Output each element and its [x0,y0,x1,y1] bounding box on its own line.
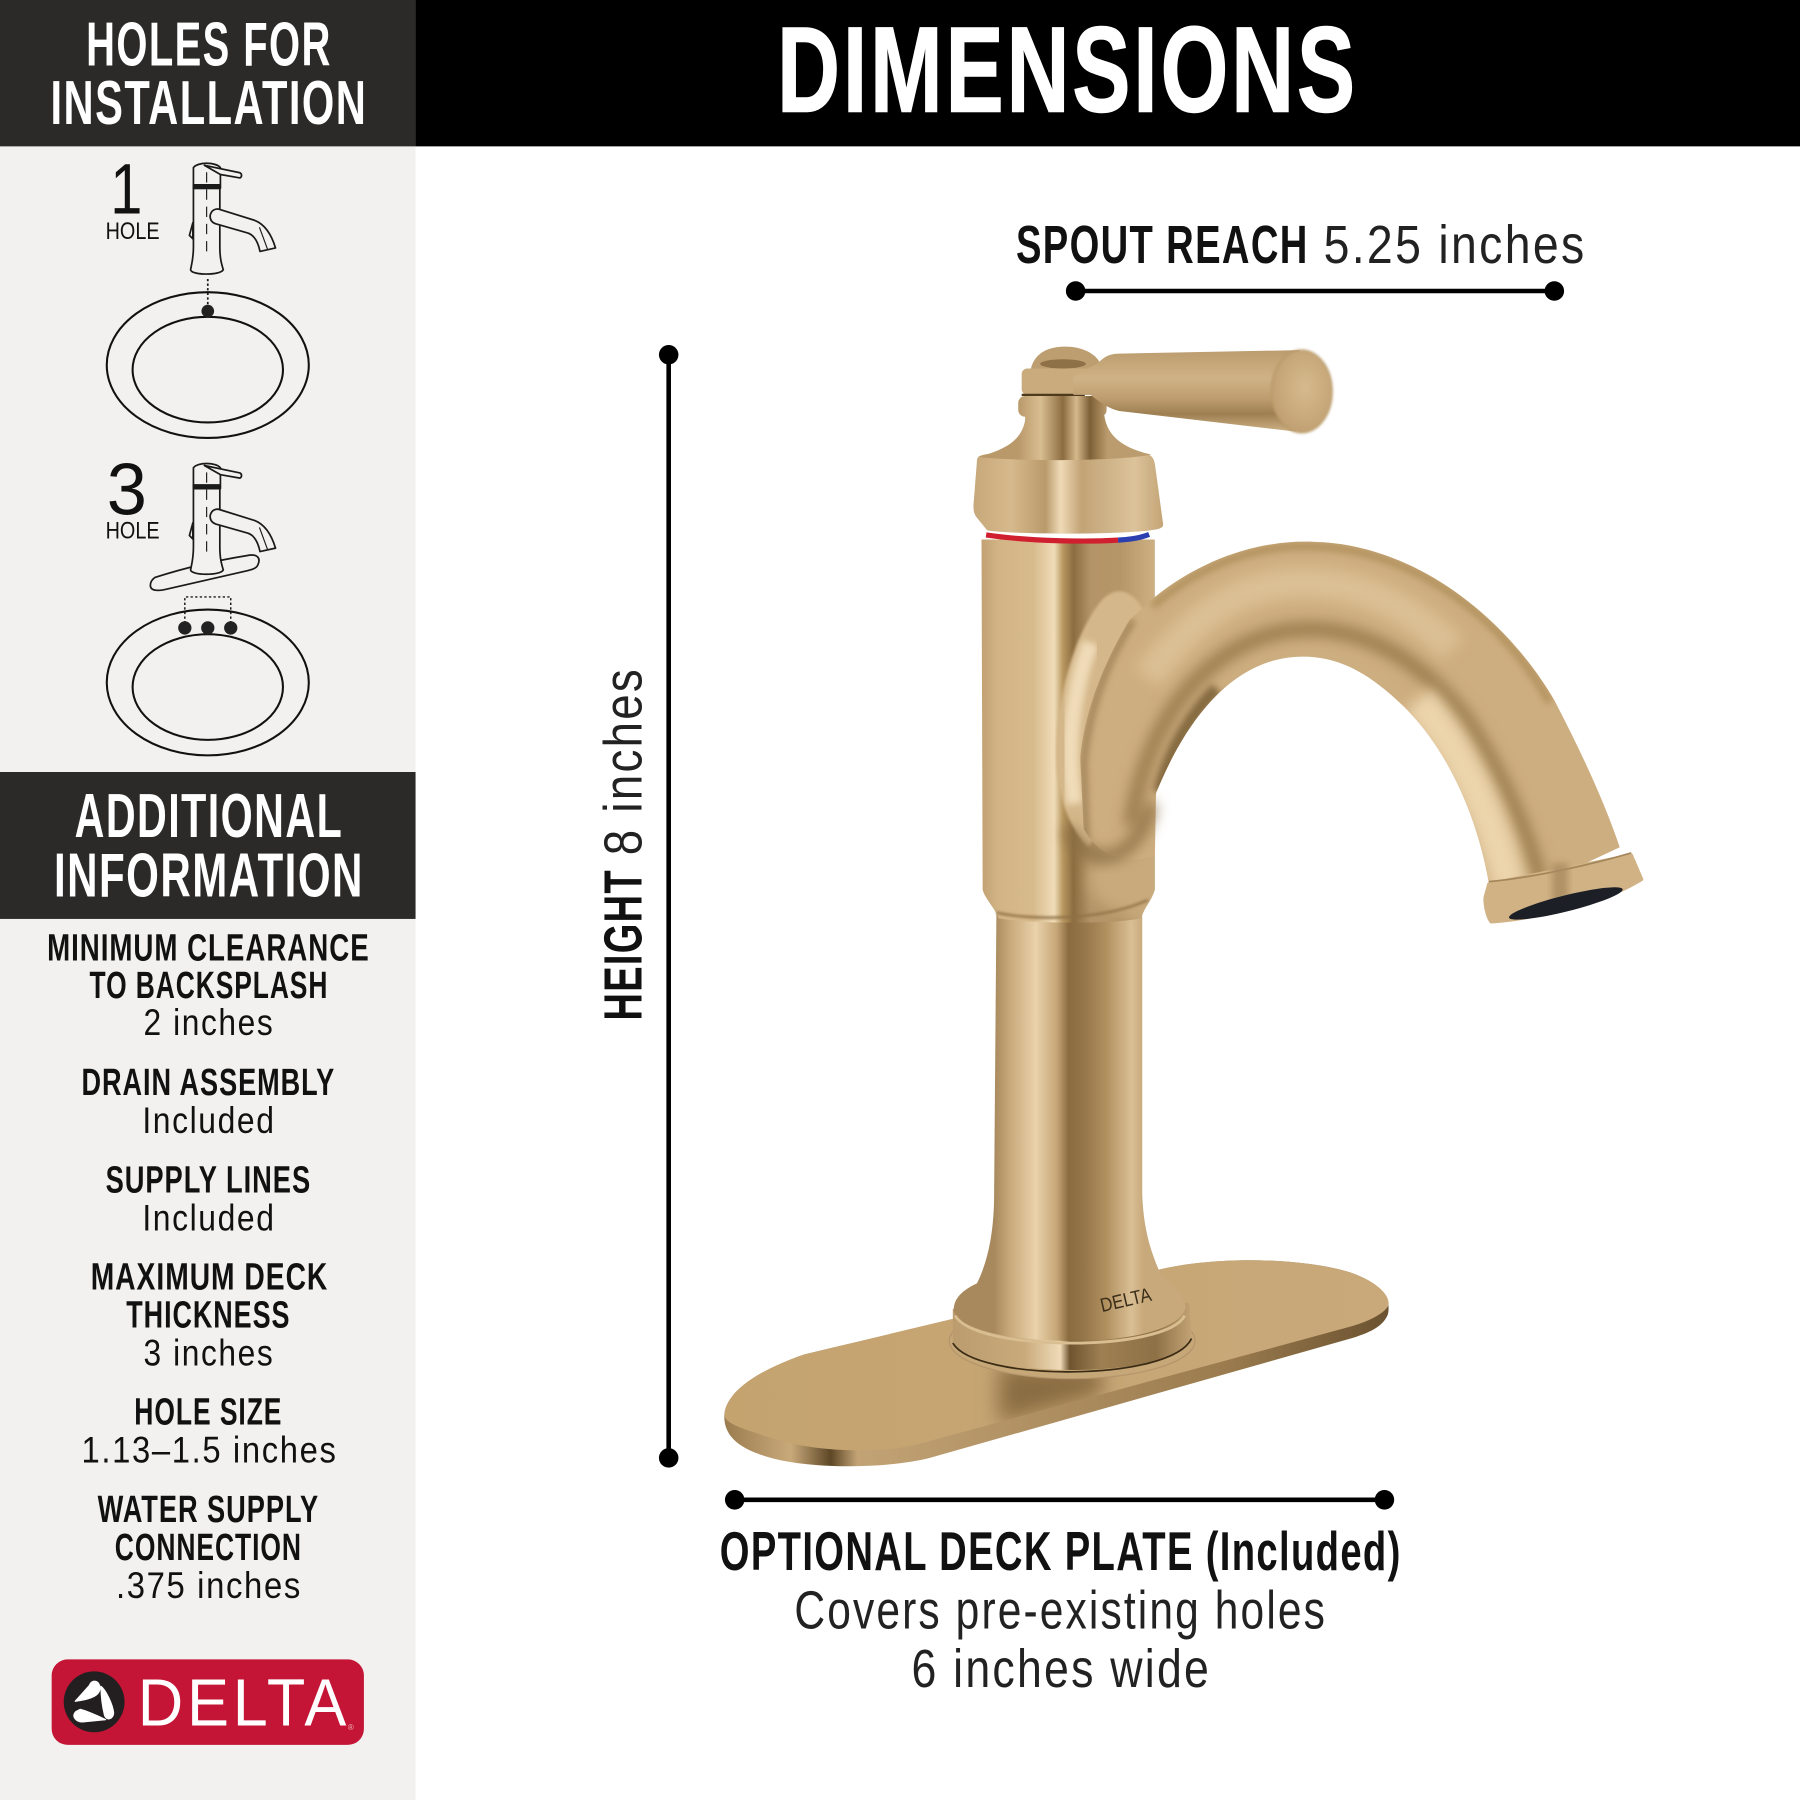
spec: maximum deck thickness: 3 inches [143,1332,274,1373]
spec: water supply connection: .375 inches [116,1565,302,1606]
dimension: spout reach: SPOUT REACH [1016,215,1309,275]
spout flange and aerator [1485,853,1642,925]
lever handle [1073,350,1332,433]
label: 1 hole: HOLE [106,218,160,245]
dimension: optional deck plate: 6 inches wide [911,1639,1211,1699]
spec list [47,927,370,1606]
spec: supply lines: Included [142,1198,276,1239]
dimension: spout reach [1016,215,1586,301]
title: dimensions [416,0,1800,146]
spec: minimum clearance: MINIMUM CLEARANCE [47,927,370,969]
dark fold under spout junction [1068,804,1151,857]
dimension: height: HEIGHT [594,869,654,1021]
icon: deck plate line drawing [150,555,259,590]
spec: minimum clearance: TO BACKSPLASH [90,965,328,1007]
lower column and flared foot [954,909,1186,1341]
spec: hole size: 1.13–1.5 inches [82,1430,338,1471]
spec: maximum deck thickness: THICKNESS [126,1295,290,1337]
icon: sink with one hole [107,292,309,438]
header: holes for installation [0,0,416,146]
icon: sink with three holes [107,610,309,755]
panel: left sidebar background [0,0,416,1800]
dimension: optional deck plate [720,1490,1402,1699]
deck plate [724,1260,1389,1466]
spec: minimum clearance: 2 inches [143,1002,274,1043]
diagram: one hole installation [106,151,309,438]
label: 3 hole [106,447,160,544]
dimension: height [594,345,678,1468]
dimension: optional deck plate: Covers pre-existing holes [794,1580,1327,1640]
spec: maximum deck thickness [91,1257,328,1373]
handle neck [978,347,1151,460]
spec: minimum clearance [47,927,370,1043]
spec: drain assembly: Included [142,1100,276,1141]
spec: hole size [82,1392,338,1471]
header: additional information [0,772,416,919]
connector: dotted bracket to holes [185,597,231,623]
spec: water supply connection [98,1489,319,1606]
dimension: height: 8 inches [594,667,654,855]
connector: dotted line to hole [207,279,209,307]
spec: hole size: HOLE SIZE [134,1392,282,1434]
foot collar highlight [955,1316,1185,1343]
logo: delta [52,1659,364,1745]
logo: delta: DELTA [138,1666,350,1740]
spec: water supply connection: CONNECTION [115,1527,302,1569]
label: 3 hole: HOLE [106,517,160,544]
photo: brushed gold faucet [724,347,1642,1466]
spec: supply lines [106,1160,311,1239]
icon: faucet line drawing with plate [189,463,276,574]
dimension: spout reach: 5.25 inches [1324,215,1586,275]
label: 1 hole [106,151,160,245]
upper column [982,540,1155,923]
icon: faucet line drawing [189,163,276,274]
soft tan patch below spout junction [1086,856,1155,914]
label: 3 hole: 3 [107,447,147,530]
label: 1 hole: 1 [110,151,142,230]
dimension: optional deck plate: OPTIONAL DECK PLATE (Included) [720,1520,1402,1582]
spec: maximum deck thickness: MAXIMUM DECK [91,1257,328,1299]
spec: drain assembly [82,1062,335,1141]
diagram: three hole installation [106,447,309,755]
red and blue temperature band [986,534,1149,541]
header: additional information: ADDITIONAL [75,782,343,851]
handle cap [973,451,1163,534]
base ring [949,1303,1195,1379]
collar crease [996,900,1148,918]
spout arc [1080,542,1620,882]
logo: delta: ® [348,1723,354,1732]
header: additional information: INFORMATION [54,842,364,911]
spec: water supply connection: WATER SUPPLY [98,1489,319,1531]
header: holes for installation: INSTALLATION [51,69,367,138]
title: dimensions: DIMENSIONS [777,1,1358,137]
spec: supply lines: SUPPLY LINES [106,1160,311,1202]
spout junction lobe [1056,591,1143,847]
spec: drain assembly: DRAIN ASSEMBLY [82,1062,335,1104]
engraved brand text: DELTA [1098,1284,1153,1317]
header: holes for installation: HOLES FOR [86,10,332,79]
